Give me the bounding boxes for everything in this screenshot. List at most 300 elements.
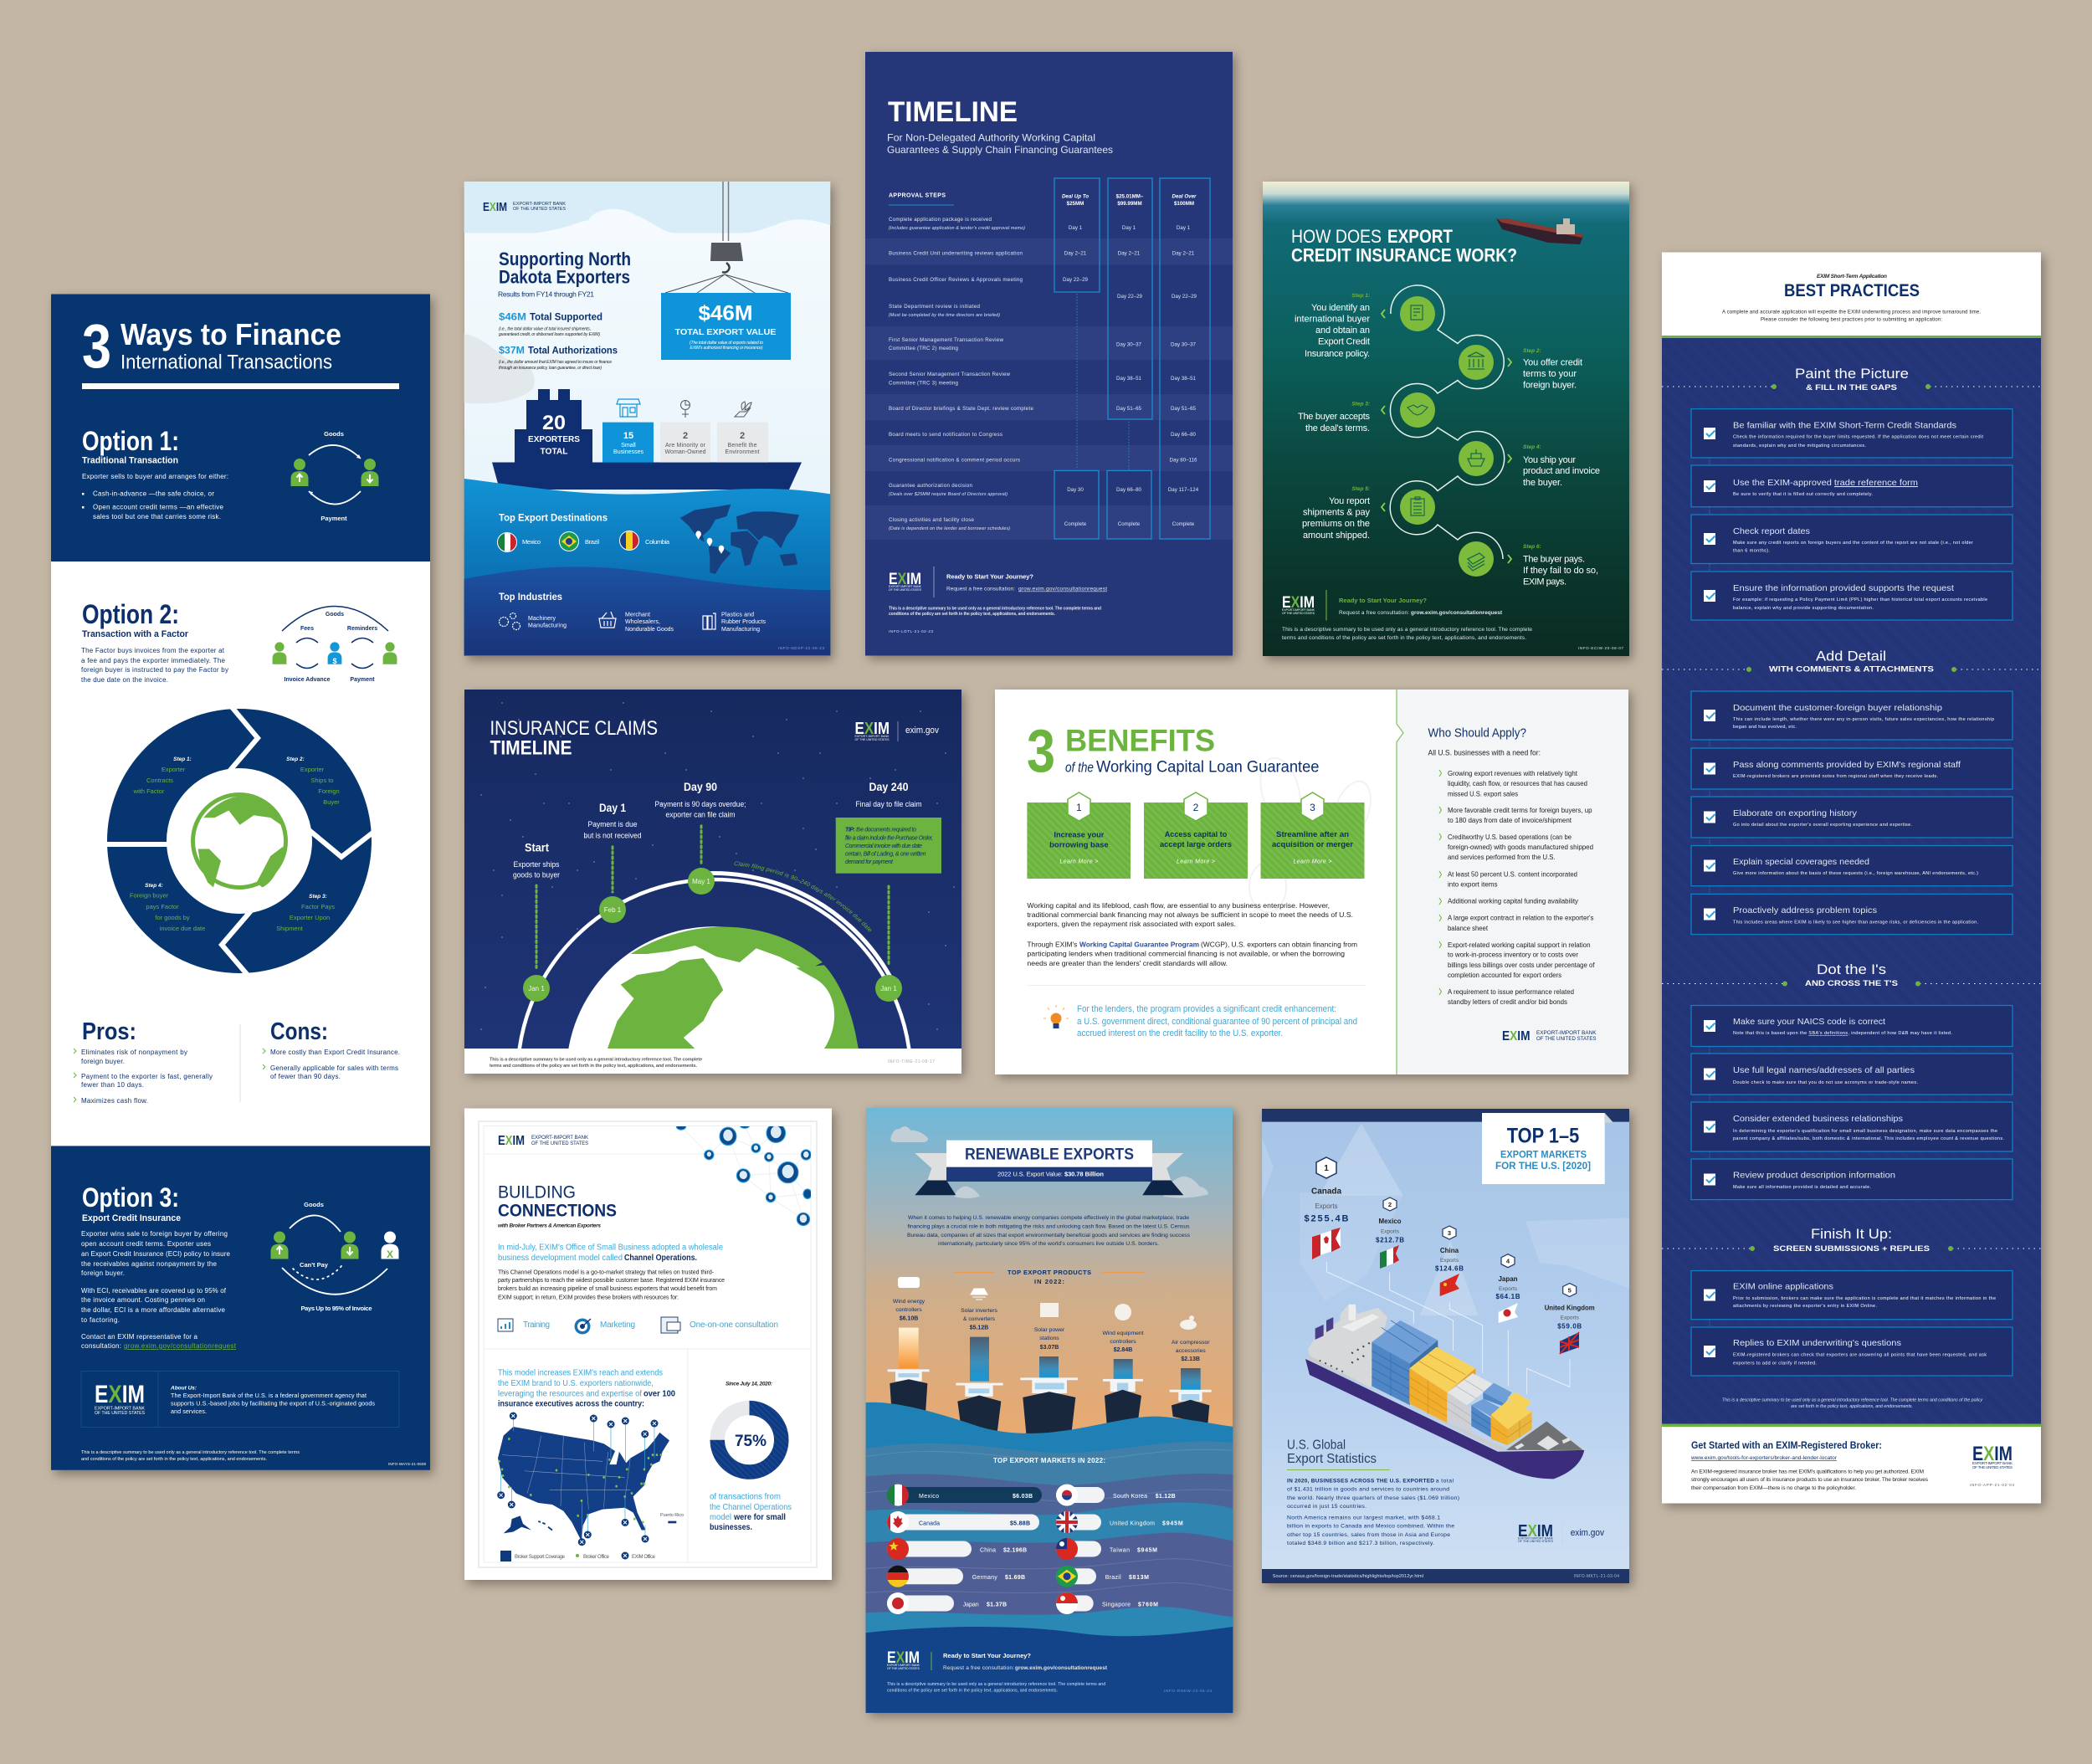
market 4: Japan: Exports — [1499, 1286, 1518, 1292]
market bar: Taiwan — [1054, 1537, 1157, 1561]
sidebar: who should apply: billings less billings over costs under percentage of — [1448, 961, 1595, 969]
stat: benefit the environment: 2 — [740, 431, 745, 441]
milestone: day 90: Payment is 90 days overdue; — [654, 800, 746, 809]
text: step 4: invoice due date — [160, 925, 205, 932]
text block: U.S. global export statistics: U.S. Global — [1287, 1438, 1346, 1453]
step 6: If they fail to do so, — [1523, 566, 1598, 576]
yellow stack — [1409, 1347, 1475, 1392]
text block: option 1: sales tool but one that carries some risk. — [93, 513, 221, 520]
stat: benefit the environment: Environment — [725, 449, 760, 455]
checklist item 12: parent company & affiliates/subs, both domestic & international. This includes employee count & revenue questions. — [1733, 1136, 2004, 1141]
checklist item 1: standards, explain why and the mitigating circumstances. — [1733, 444, 1866, 449]
map: United States broker coverage: Puerto Rico — [660, 1513, 684, 1518]
title: Dakota Exporters — [499, 266, 630, 288]
text block: pros: Payment to the exporter is fast, generally — [81, 1073, 213, 1080]
footer: conditions of the policy are set forth in the policy text, applications, and endorsements. — [887, 1689, 1058, 1694]
text block: intro: party partnerships to reach the widest possible customer base. Registered EXIM insurance — [498, 1278, 725, 1284]
product: air compressor accessories: accessories — [1176, 1348, 1206, 1354]
header: BEST PRACTICES — [1784, 281, 1920, 300]
text: step 3: Step 3: — [309, 894, 327, 900]
footer: broker call to action: strongly encourages all users of its insurance products to use an insurance broker. The broker receives — [1691, 1477, 1929, 1483]
icon: training — [498, 1319, 513, 1331]
illustration: crane and container — [661, 182, 791, 360]
section: top industries: Plastics and — [721, 613, 754, 618]
title: CREDIT INSURANCE WORK? — [1291, 244, 1517, 266]
benefit card 1: borrowing base — [1049, 841, 1109, 850]
step 4: You ship your — [1523, 455, 1576, 465]
stats — [499, 311, 618, 371]
callout: tip — [836, 818, 941, 874]
step 1: You identify an — [1311, 303, 1370, 313]
logo: EXIM: OF THE UNITED STATES — [1536, 1037, 1597, 1042]
title — [1027, 718, 1319, 785]
product: wind energy controllers: Wind energy — [893, 1299, 926, 1305]
panel: Building Connections — [464, 1108, 835, 1584]
panel: How does export credit insurance work — [1263, 182, 1633, 660]
text block: intro — [907, 1215, 1191, 1247]
text block: cons: More costly than Export Credit Insurance. — [270, 1049, 400, 1056]
legend: EXIM Office — [632, 1555, 656, 1560]
section heading: Finish It Up — [1662, 1226, 2041, 1253]
logo: EXIM: EXPORT-IMPORT BANK — [95, 1406, 145, 1411]
stat: minority or woman owned: Woman-Owned — [664, 449, 706, 455]
text block: pros — [74, 1018, 213, 1105]
step 4: Step 4: — [1523, 444, 1541, 450]
table: approval steps: Congressional notification & comment period occurs — [889, 457, 1020, 464]
column: deal $25.01MM to $99.99MM: $25.01MM– — [1116, 194, 1144, 200]
diagram: export credit insurance: Pays Up to 95% of Invoice — [301, 1305, 372, 1312]
checklist item 5: began and has evolved, etc. — [1733, 725, 1797, 730]
text block: option 3: consultation: — [81, 1342, 121, 1350]
text: step 4 — [130, 883, 205, 932]
title: 3 Ways to Finance: Ways to Finance — [120, 317, 341, 351]
title: Working Capital Loan Guarantee — [1096, 759, 1319, 777]
gray stack — [1447, 1373, 1494, 1405]
section heading: Add Detail — [1662, 648, 2041, 674]
step 2 — [1459, 345, 1582, 391]
milestone: day 1: Feb 1 — [604, 906, 622, 914]
text block: description: exporters, given the repayment risk associated with export sales. — [1027, 920, 1236, 928]
section: top industries: Rubber Products — [721, 619, 767, 625]
market 1: Canada: Exports — [1315, 1202, 1338, 1210]
text block: intro — [498, 1244, 725, 1301]
market 3: China: 3 — [1448, 1229, 1451, 1237]
about us box: and services. — [171, 1408, 207, 1415]
product: solar inverters: & converters — [963, 1316, 996, 1322]
text block: option 1: Open account credit terms —an effective — [93, 504, 224, 511]
product: wind energy controllers — [893, 1277, 926, 1368]
table: approval steps: (Date is dependent on the lender and borrower schedules) — [889, 526, 1010, 531]
step 5 — [1302, 486, 1435, 541]
market 1: Canada: Canada — [1311, 1187, 1341, 1197]
table: approval steps: Committee (TRC 3) meeting — [889, 380, 959, 387]
step 2: terms to your — [1523, 369, 1577, 379]
checklist item 10: Note that this is based upon the SBA's definitions, independent of how D&B may have it listed. — [1733, 1031, 1952, 1036]
step 2: You offer credit — [1523, 358, 1582, 368]
caption: small businesses: the Channel Operations — [710, 1503, 792, 1512]
section: top industries: Manufacturing — [528, 623, 567, 629]
footer: OF THE UNITED STATES — [887, 1667, 920, 1670]
stat: minority or woman owned — [660, 400, 710, 463]
checklist item 8: Explain special coverages needed — [1733, 857, 1869, 867]
checklist item 15: EXIM-registered brokers can check that exporters are answering all points that have been requested, and ask — [1733, 1352, 1987, 1357]
column: deal $25.01MM to $99.99MM: Day 1 — [1122, 225, 1136, 231]
product: air compressor accessories: $2.13B — [1181, 1356, 1200, 1362]
column: deal up to $25MM — [1054, 178, 1100, 539]
step 1 — [1295, 293, 1435, 359]
text block: option 3: Contact an EXIM representative for a — [81, 1333, 198, 1341]
diagram: traditional transaction: Goods — [324, 430, 344, 438]
product: wind equipment controllers: controllers — [1110, 1339, 1136, 1345]
text: step 1: with Factor — [133, 787, 165, 795]
market 5: United Kingdom — [1545, 1284, 1595, 1354]
checklist item 2: Use the EXIM-approved trade reference form — [1733, 478, 1918, 488]
column: deal over $100MM: Day 51–65 — [1171, 406, 1197, 412]
callout: lender benefit — [1043, 1004, 1357, 1038]
sidebar: who should apply: Export-related working capital support in relation — [1448, 941, 1590, 949]
step 4 — [1459, 441, 1600, 488]
text block: pros: Eliminates risk of nonpayment by — [81, 1049, 187, 1056]
title: HOW DOES — [1291, 226, 1382, 247]
checklist item 5 — [1691, 691, 2013, 740]
market 2: Mexico: 2 — [1388, 1201, 1392, 1208]
column: deal $25.01MM to $99.99MM: Day 2–21 — [1118, 251, 1141, 256]
title: 3 Ways to Finance: International Transactions — [120, 351, 332, 373]
logo: EXIM and exim.gov — [1518, 1522, 1604, 1545]
chart: 75 percent donut: 75% — [735, 1433, 767, 1450]
diagram: factor transaction: Fees — [300, 626, 314, 632]
milestone: day 1: Payment is due — [587, 820, 638, 829]
stats: $37M — [499, 345, 525, 356]
section heading: Dot the I's: Dot the I's — [1817, 961, 1886, 977]
stat: minority or woman owned: 2 — [683, 431, 688, 441]
illustration: cargo ship: EXPORTERS — [528, 435, 580, 444]
text block: U.S. global export statistics — [1287, 1438, 1459, 1546]
footer bar: INFO-MKTL-21-03-04 — [1574, 1574, 1619, 1579]
resources: training, marketing, consultation: One-on-one consultation — [690, 1320, 778, 1330]
product: wind equipment controllers: Wind equipment — [1102, 1331, 1144, 1336]
market 3: China: China — [1440, 1247, 1459, 1254]
text block: description: needs are greater than the lenders' credit standards will allow. — [1027, 959, 1228, 967]
text: step 2 — [286, 756, 340, 806]
header: A complete and accurate application will expedite the EXIM underwriting process and improve turnaround time. — [1722, 310, 1981, 315]
market 5: United Kingdom: $59.0B — [1557, 1322, 1582, 1331]
table: approval steps: (Must be completed by the time directors are briefed) — [889, 313, 1000, 318]
sidebar: who should apply — [1428, 726, 1595, 1006]
text: step 4: pays Factor — [146, 903, 179, 910]
text block: U.S. global export statistics: billion in exports to Canada and Mexico combined. Within the — [1287, 1523, 1454, 1530]
milestone: day 1: but is not received — [584, 832, 641, 841]
title: of the — [1065, 760, 1094, 776]
sidebar: who should apply: A large export contract in relation to the exporter's — [1448, 915, 1593, 922]
sidebar: who should apply: Who Should Apply? — [1428, 726, 1526, 741]
checklist item 14: EXIM online applications — [1733, 1282, 1833, 1292]
checklist item 6: EXIM-registered brokers are provided notes from regional staff when they receive leads. — [1733, 774, 1938, 779]
logo: EXIM and exim.gov: EXIM — [855, 720, 890, 738]
heading: top export products: IN 2022: — [1034, 1278, 1064, 1285]
text block: option 1: Exporter sells to buyer and arranges for either: — [82, 473, 228, 480]
title card — [1482, 1113, 1613, 1184]
section: top export destinations: Brazil — [585, 538, 599, 546]
step 6: The buyer pays. — [1523, 554, 1585, 564]
panel: Best Practices — [1662, 253, 2044, 1507]
text block: intro: business development model called — [498, 1254, 623, 1263]
checklist item 7 — [1691, 797, 2013, 838]
legend: Broker Office — [583, 1555, 610, 1560]
caption: small businesses: businesses. — [710, 1523, 752, 1532]
column: deal over $100MM: Day 38–51 — [1171, 376, 1197, 382]
benefit card 1 — [1027, 792, 1131, 879]
footer: This is a descriptive summary to be used only as a general introductory reference tool. The complete terms and — [887, 1682, 1105, 1687]
benefit card 1: 1 — [1076, 802, 1082, 813]
checklist item 15: exporters to add or clarify if needed. — [1733, 1361, 1817, 1366]
market 5: United Kingdom: Exports — [1561, 1315, 1579, 1321]
stats: Total Supported — [530, 311, 602, 323]
text block: option 2: The Factor buys invoices from the exporter at — [81, 647, 225, 654]
footer: terms and conditions of the policy are set forth in the policy text, applications, and endorsements. — [1282, 635, 1526, 641]
milestone: start: Exporter ships — [514, 860, 560, 869]
checklist item 11: Double check to make sure that you do not use acronyms or trade-style names. — [1733, 1080, 1918, 1085]
callout: tip: TIP: the documents required to — [845, 828, 916, 833]
section: top export destinations: Top Export Destinations — [499, 512, 608, 524]
footer — [464, 1049, 961, 1074]
sidebar: who should apply: More favorable credit terms for foreign buyers, up — [1448, 807, 1592, 814]
section heading: Finish It Up: SCREEN SUBMISSIONS + REPLIES — [1773, 1244, 1930, 1253]
market bar: Japan — [887, 1592, 1007, 1614]
product: solar power stations — [1034, 1303, 1065, 1378]
text: step 3: Shipment — [276, 925, 304, 932]
market bar: Brazil: $813M — [1129, 1575, 1149, 1581]
market 5: United Kingdom: United Kingdom — [1545, 1305, 1595, 1312]
blue stack — [1372, 1320, 1438, 1364]
sidebar: who should apply: Growing export revenues with relatively tight — [1448, 770, 1578, 777]
banner: Renewable Exports — [915, 1141, 1183, 1195]
stat: small businesses: 15 — [623, 431, 633, 441]
diagram: factor transaction: Invoice Advance — [285, 677, 331, 683]
text: step 1 — [133, 756, 192, 795]
checklist item 7: Elaborate on exporting history — [1733, 808, 1858, 818]
text block: option 3: an Export Credit Insurance (ECI) policy to insure — [81, 1250, 231, 1258]
table: approval steps — [889, 193, 1034, 531]
text block: option 3: Exporter wins sale to foreign buyer by offering — [81, 1230, 228, 1238]
footer: Ready to Start Your Journey? — [946, 573, 1033, 581]
stats: through an insurance policy, loan guarantee, or direct loan) — [499, 366, 602, 371]
panel: Insurance Claims Timeline — [462, 688, 971, 1083]
diagram: export credit insurance: Goods — [304, 1201, 324, 1208]
sidebar: who should apply: liquidity, cash flow, or resources that has caused — [1448, 780, 1587, 787]
about us box: supports U.S.-based jobs by facilitating the export of U.S.-originated goods — [171, 1399, 375, 1408]
text: step 2: Step 2: — [286, 756, 305, 762]
milestone: day 1: Day 1 — [599, 801, 626, 814]
checklist item 3: than 6 months). — [1733, 549, 1770, 554]
footer — [887, 1649, 1212, 1694]
market bar: Canada: Canada — [919, 1521, 940, 1526]
text block: intro: Channel Operations. — [624, 1254, 697, 1263]
logo: EXIM: EXIM — [1502, 1029, 1530, 1044]
column: deal up to $25MM: Day 30 — [1067, 487, 1084, 493]
text block: option 3: With ECI, receivables are covered up to 95% of — [81, 1287, 227, 1295]
column: deal up to $25MM: Complete — [1064, 521, 1087, 527]
title — [490, 717, 658, 760]
text: step 2: Buyer — [323, 798, 340, 806]
stat: benefit the environment: Benefit the — [728, 443, 757, 449]
callout: tip: certain, Bill of Lading, & one written — [845, 852, 926, 858]
icon: Colombia flag — [620, 531, 638, 550]
sidebar: who should apply: Additional working capital funding availability — [1448, 898, 1578, 905]
footer: broker call to action: Get Started with an EXIM-Registered Broker: — [1691, 1441, 1882, 1451]
footer bar: Source: census.gov/foreign-trade/statistics/highlights/top/top2012yr.html — [1273, 1574, 1423, 1579]
step 4: the buyer. — [1523, 478, 1562, 488]
sidebar: who should apply: All U.S. businesses with a need for: — [1428, 749, 1541, 757]
milestone: day 1 — [584, 801, 641, 923]
illustration: cargo ship: 20 — [542, 412, 566, 434]
text block: reach: over 100 — [643, 1390, 675, 1399]
stat: minority or woman owned: Are Minority or — [665, 443, 706, 449]
market 4: Japan: $64.1B — [1496, 1293, 1520, 1300]
checklist item 14: Prior to submission, brokers can make sure the application is complete and that it matches the information in the — [1733, 1296, 1996, 1301]
text: step 4: Step 4: — [145, 883, 163, 889]
title: TIMELINE — [490, 737, 572, 760]
market bar: China: $2.196B — [1003, 1548, 1027, 1553]
checklist item 1 — [1691, 409, 2013, 458]
section: top export destinations: Mexico — [522, 538, 541, 546]
stat: small businesses — [602, 399, 654, 463]
section heading: Add Detail: WITH COMMENTS & ATTACHMENTS — [1769, 665, 1934, 674]
market 3: China: $124.6B — [1435, 1265, 1464, 1273]
logo: EXIM and exim.gov: OF THE UNITED STATES — [1518, 1540, 1554, 1543]
table: approval steps: Business Credit Officer Reviews & Approvals meeting — [889, 277, 1023, 283]
text: step 3: Factor Pays — [301, 903, 335, 910]
footer: EXPORT-IMPORT BANK — [889, 585, 922, 588]
section heading: Paint the Picture: Paint the Picture — [1795, 366, 1909, 382]
product: wind equipment controllers — [1102, 1304, 1144, 1380]
footer: This is a descriptive summary to be used only as a general introductory reference tool. The complete — [1282, 627, 1532, 633]
title: 3 Ways to Finance: 3 — [82, 311, 111, 381]
text block: reach — [498, 1369, 675, 1409]
step 5: amount shipped. — [1303, 531, 1370, 541]
section: top export destinations: Columbia — [645, 538, 670, 546]
logo: EXIM — [1502, 1029, 1597, 1044]
text: step 2: Foreign — [318, 787, 340, 795]
title: 3 — [1027, 718, 1055, 785]
checklist item 15 — [1691, 1327, 2013, 1376]
checklist item 6 — [1691, 748, 2013, 789]
checklist item 2: Be sure to verify that it is filled out correctly and completely. — [1733, 492, 1873, 497]
footer: disclaimer: INFO-WAYS-21-0608 — [388, 1462, 426, 1466]
text block: intro: brokers build an increasing pipeline of small business exporters that would benefit from — [498, 1286, 717, 1292]
step 6: EXIM pays. — [1523, 577, 1566, 587]
step 4: product and invoice — [1523, 466, 1600, 476]
yellow stack bow — [1508, 1392, 1531, 1412]
footer: terms and conditions of the policy are set forth in the policy text, applications, and endorsements. — [490, 1064, 697, 1069]
table: approval steps: Board meets to send notification to Congress — [889, 432, 1002, 438]
step 5: Step 5: — [1351, 486, 1370, 492]
sidebar: who should apply: Creditworthy U.S. based operations (can be — [1448, 833, 1572, 841]
market bar: Singapore: $760M — [1138, 1602, 1158, 1608]
column: deal $25.01MM to $99.99MM: Day 51–65 — [1116, 406, 1142, 412]
footer: grow.exim.gov/consultationrequest — [1015, 1665, 1108, 1671]
section: top industries: Merchant — [625, 613, 650, 618]
milestone: day 90: May 1 — [692, 878, 710, 885]
section: top industries: Nondurable Goods — [625, 627, 674, 633]
diagram: traditional transaction — [291, 430, 378, 522]
benefit card 3: Learn More > — [1294, 859, 1332, 865]
column: deal $25.01MM to $99.99MM: Day 38–51 — [1116, 376, 1142, 382]
text block: pros: Maximizes cash flow. — [81, 1097, 148, 1105]
step 5: premiums on the — [1302, 519, 1370, 529]
step 1: Insurance policy. — [1305, 349, 1370, 359]
footer: EXPORT-IMPORT BANK — [1282, 608, 1315, 612]
panel: Top 1-5 Export Markets — [1262, 1109, 1633, 1587]
illustration: container ship — [1305, 1305, 1584, 1479]
text block: reach: leveraging the resources and expertise of — [498, 1390, 642, 1399]
benefit card 3 — [1260, 792, 1364, 879]
market 1: Canada: $255.4B — [1304, 1214, 1349, 1224]
text block: cons — [263, 1018, 400, 1080]
column: deal over $100MM: Day 117–124 — [1168, 487, 1199, 493]
benefit card 3: 3 — [1310, 802, 1315, 813]
checklist item 4: Ensure the information provided supports the request — [1733, 583, 1954, 593]
icon: Mexico flag — [498, 533, 517, 551]
panel: Supporting North Dakota Exporters: INFO-NDXP-22-06-23 — [778, 646, 824, 650]
text block: reach: the EXIM brand to U.S. exporters nationwide, — [498, 1379, 654, 1388]
checklist item 1: Check the information required for the buyer limits requested. If the application does not meet certain credit — [1733, 435, 1983, 440]
callout: lender benefit: accrued interest on the credit facility to the U.S. exporter. — [1077, 1028, 1283, 1038]
text block: description: (WCGP), U.S. exporters can obtain financing from — [1201, 941, 1357, 949]
table: approval steps: First Senior Management Transaction Review — [889, 337, 1004, 343]
market bar: China: China — [980, 1548, 996, 1553]
market bar: Japan: Japan — [963, 1602, 979, 1608]
text block: description — [1027, 901, 1357, 967]
callout: lender benefit: For the lenders, the program provides a significant credit enhancement: — [1077, 1004, 1336, 1014]
text block: U.S. global export statistics: a total — [1436, 1478, 1454, 1485]
text: step 3 — [276, 894, 335, 932]
caption: small businesses: of transactions from — [710, 1492, 781, 1501]
market 4: Japan — [1496, 1254, 1520, 1323]
illustration: ocean waves — [866, 1402, 1233, 1713]
market bar: United Kingdom: United Kingdom — [1110, 1521, 1155, 1526]
market bar: Canada: $5.88B — [1010, 1521, 1030, 1526]
product: solar power stations: stations — [1039, 1336, 1059, 1341]
market bar: Germany: $1.69B — [1005, 1575, 1025, 1581]
title — [498, 249, 631, 299]
benefit card 3: acquisition or merger — [1272, 840, 1353, 849]
market 4: Japan: Japan — [1498, 1275, 1518, 1283]
sidebar: who should apply: balance sheet — [1448, 925, 1489, 932]
step 1: Export Credit — [1318, 337, 1370, 347]
stats: Total Authorizations — [528, 345, 618, 356]
caption: small businesses: model — [710, 1513, 731, 1522]
text block: reach: insurance executives across the country: — [498, 1399, 644, 1409]
caption: small businesses — [710, 1492, 792, 1532]
market bar: Singapore — [1056, 1592, 1158, 1614]
milestone: start: Start — [525, 841, 549, 854]
title: EXPORT — [1387, 226, 1453, 247]
footer: Ready to Start Your Journey? — [943, 1652, 1031, 1659]
header: EXIM Short-Term Application — [1817, 274, 1887, 279]
callout: lender benefit: a U.S. government direct, conditional guarantee of 90 percent of principal and — [1077, 1017, 1357, 1027]
callout: tip: file a claim include the Purchase Order, — [845, 836, 933, 842]
illustration: crane and container: $46M — [698, 301, 753, 325]
disclaimer — [1722, 1398, 1982, 1409]
column: deal over $100MM: Day 30–37 — [1171, 342, 1197, 348]
banner: Renewable Exports: 2022 U.S. Export Value: — [997, 1171, 1063, 1178]
sidebar: who should apply: to work-in-process inventory or to costs over — [1448, 951, 1578, 959]
step 1: and obtain an — [1315, 326, 1370, 336]
sidebar: who should apply: standby letters of credit and/or bid bonds — [1448, 998, 1567, 1006]
text block: intro: Bureau data, companies of all sizes that export environmentally beneficial goods and services are finding success — [907, 1233, 1191, 1238]
title: TIMELINE — [888, 96, 1018, 128]
